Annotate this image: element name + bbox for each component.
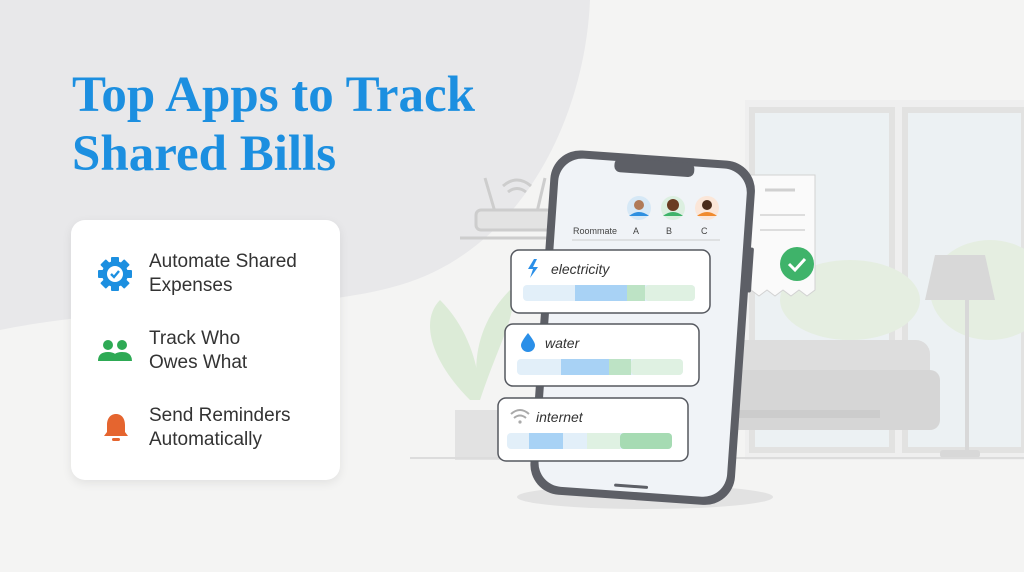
roommate header: B <box>666 226 672 236</box>
plant <box>430 290 513 460</box>
receipt <box>748 175 815 296</box>
feature: reminders <box>104 405 291 450</box>
roommate header: C <box>701 226 708 236</box>
card: internet <box>498 398 688 461</box>
icon: check badge <box>780 247 814 281</box>
roommate header: A <box>633 226 639 236</box>
icon: gear <box>98 257 132 291</box>
text <box>149 405 291 450</box>
text: Automatically <box>149 429 262 450</box>
text: Send Reminders <box>149 405 291 426</box>
icon: bell <box>104 414 128 441</box>
roommate header: Roommate <box>573 226 617 236</box>
title: Shared Bills <box>72 126 336 182</box>
phone body <box>528 148 760 507</box>
title: Top Apps to Track <box>72 67 475 123</box>
card: water <box>505 324 699 386</box>
feature: automate <box>98 251 297 296</box>
router <box>460 178 570 238</box>
card: internet: internet <box>536 409 584 425</box>
text: Expenses <box>149 275 232 296</box>
text <box>149 328 247 373</box>
window <box>745 100 1024 460</box>
title <box>72 67 475 182</box>
card: electricity <box>511 250 710 313</box>
panel: features <box>71 220 340 480</box>
text: Automate Shared <box>149 251 297 272</box>
lamp <box>925 255 995 458</box>
text <box>149 251 297 296</box>
feature: track <box>98 328 247 373</box>
card: water: water <box>545 335 581 351</box>
text: Owes What <box>149 352 247 373</box>
icon: people <box>98 340 132 361</box>
card: electricity: electricity <box>551 261 610 277</box>
roommate header <box>572 196 720 240</box>
sofa <box>690 340 940 430</box>
text: Track Who <box>149 328 240 349</box>
